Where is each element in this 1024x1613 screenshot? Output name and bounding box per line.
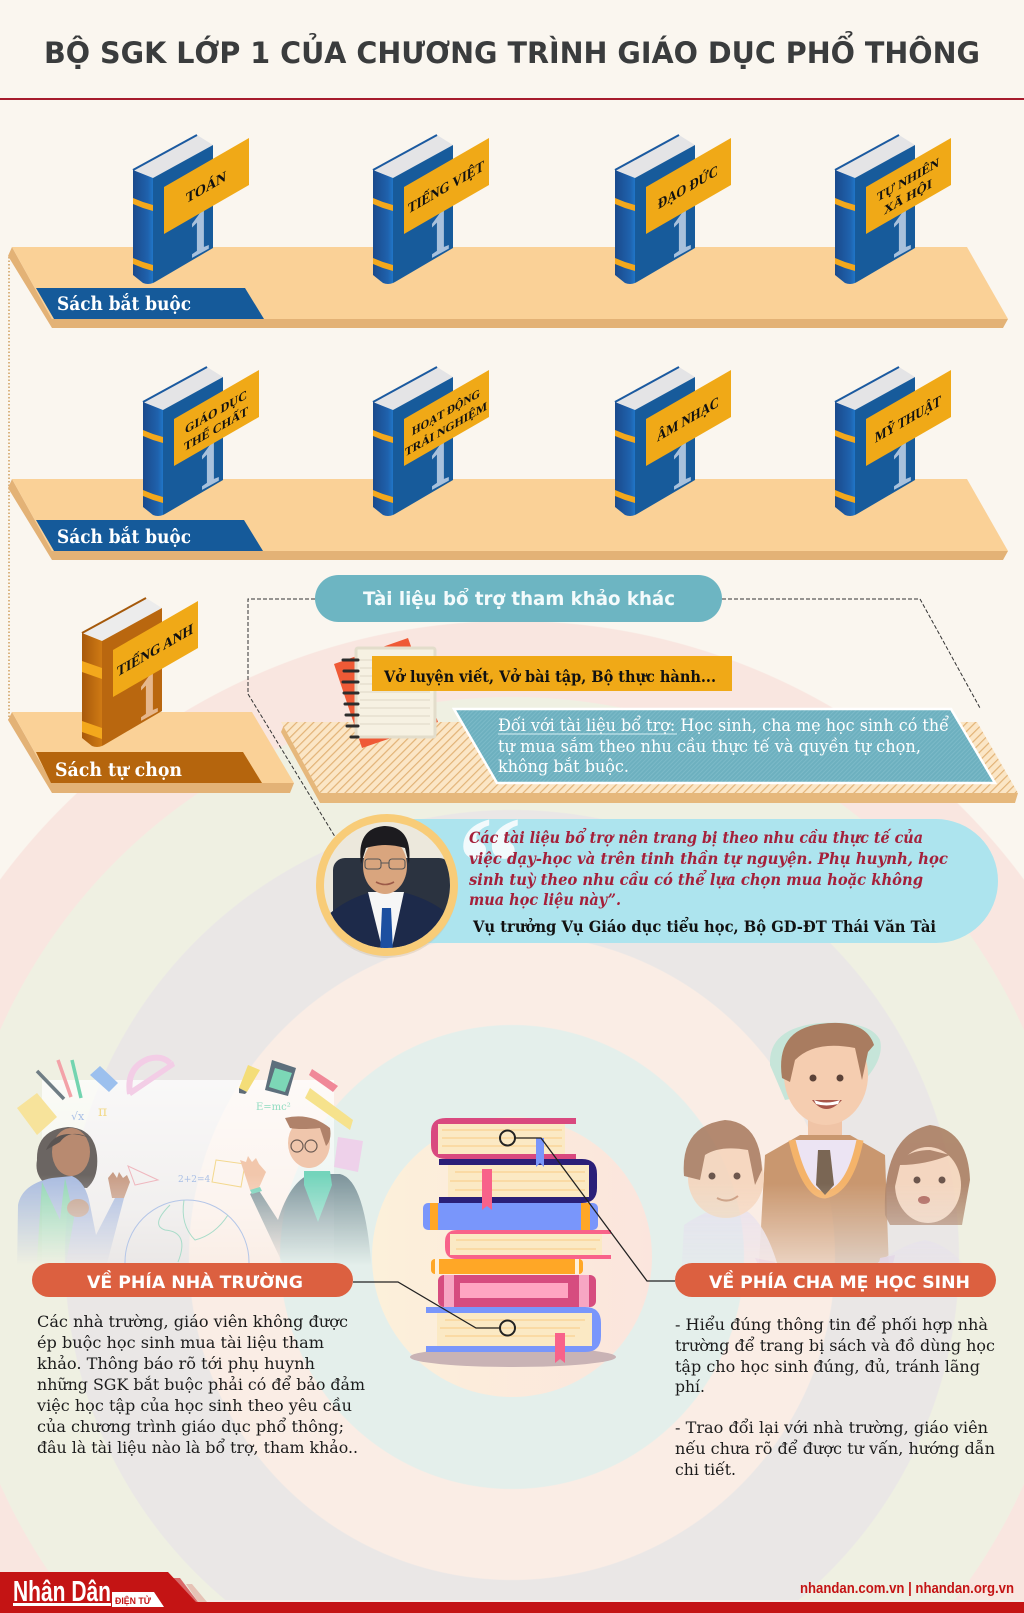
book: Đạo đức: 1 xyxy=(671,194,693,272)
quotation mark: “ xyxy=(457,791,522,935)
text: parents side xyxy=(675,1315,995,1479)
text: school side: những SGK bắt buộc phải có để bảo đảm xyxy=(37,1375,365,1394)
illustration: parents and children xyxy=(684,1022,970,1263)
bottom book xyxy=(426,1307,601,1363)
board doodles: √x xyxy=(71,1110,85,1123)
text: school side: ép buộc học sinh mua tài liệu tham xyxy=(37,1333,324,1352)
father xyxy=(761,1022,888,1263)
book: Tiếng Việt xyxy=(373,135,489,284)
text: parents side: chi tiết. xyxy=(675,1460,736,1479)
shelf 2 xyxy=(8,479,1008,560)
label: sách tự chọn: Sách tự chọn xyxy=(55,759,182,781)
dotted connector xyxy=(8,257,10,720)
shelf 3: optional book xyxy=(8,712,294,793)
logo: Nhân Dân: Nhân Dân xyxy=(13,1576,111,1608)
book: Đạo đức xyxy=(615,135,731,284)
logo: Nhân Dân: ĐIỆN TỬ xyxy=(115,1595,152,1606)
pill: school side: VỀ PHÍA NHÀ TRƯỜNG xyxy=(87,1269,303,1293)
board doodles: π xyxy=(98,1104,107,1120)
book: Âm nhạc: ÂM NHẠC xyxy=(657,392,719,446)
quote text: sinh tuỳ theo nhu cầu có thể lựa chọn mua hoặc không xyxy=(469,870,923,889)
note panel: supplementary materials: Đối với tài liệu bổ trợ: Học sinh, cha mẹ học sinh có thể xyxy=(498,716,950,736)
note panel: supplementary materials: không bắt buộc. xyxy=(498,757,629,777)
text: parents side: trường để trang bị sách và đồ dùng học xyxy=(675,1336,995,1355)
pill: parents side xyxy=(675,1263,996,1297)
connector: school to stack xyxy=(353,1282,515,1336)
pink open book xyxy=(445,1230,611,1259)
woman xyxy=(18,1127,130,1258)
text: parents side: - Trao đổi lại với nhà trường, giáo viên xyxy=(675,1418,988,1437)
text: school side: của chương trình giáo dục phổ thông; xyxy=(37,1417,344,1436)
book: Tiếng Việt: TIẾNG VIỆT xyxy=(408,156,484,218)
book: Hoạt động trải nghiệm: HOẠT ĐỘNG xyxy=(412,385,480,438)
pill heading: tài liệu bổ trợ xyxy=(315,575,722,622)
top book xyxy=(431,1118,576,1167)
book: Âm nhạc: 1 xyxy=(671,426,693,504)
quote attribution: Vụ trưởng Vụ Giáo dục tiểu học, Bộ GD-ĐT Thái Văn Tài xyxy=(472,917,936,936)
text: school side: Các nhà trường, giáo viên không được xyxy=(37,1312,348,1331)
illustration: school side xyxy=(17,1054,370,1263)
book: Tiếng Anh xyxy=(82,598,198,747)
board doodles: E=mc² xyxy=(256,1102,291,1113)
book: Tự nhiên xã hội: XÃ HỘI xyxy=(884,174,932,219)
book: Giáo dục thể chất xyxy=(143,367,259,516)
label: sách tự chọn xyxy=(36,752,262,783)
people xyxy=(18,1116,370,1258)
quote bubble xyxy=(400,791,998,943)
book: Giáo dục thể chất: THỂ CHẤT xyxy=(184,403,248,454)
quote text: việc dạy-học và trên tinh thần tự nguyện. Phụ huynh, học xyxy=(469,849,949,868)
school supplies xyxy=(17,1058,363,1172)
book: Hoạt động trải nghiệm: TRẢI NGHIỆM xyxy=(405,398,487,459)
illustration: stack of books xyxy=(410,1118,616,1367)
orange book xyxy=(431,1259,583,1274)
book: Âm nhạc xyxy=(615,367,731,516)
dark book xyxy=(439,1159,597,1210)
text: school side: khảo. Thông báo rõ tới phụ huynh xyxy=(37,1354,315,1373)
book: Toán: TOÁN xyxy=(186,166,226,207)
note panel: supplementary materials: tự mua sắm theo nhu cầu thực tế và quyền tự chọn, xyxy=(498,737,921,757)
shelf 4: hatched xyxy=(281,722,1018,803)
text: parents side: phí. xyxy=(675,1377,705,1396)
pill heading: tài liệu bổ trợ: Tài liệu bổ trợ tham khảo khác xyxy=(363,587,675,610)
title: BỘ SGK LỚP 1 CỦA CHƯƠNG TRÌNH GIÁO DỤC PHỔ THÔNG xyxy=(44,30,980,70)
note panel: supplementary materials xyxy=(454,709,995,783)
text: school side: việc học tập của học sinh theo yêu cầu xyxy=(36,1396,352,1415)
book: Tự nhiên xã hội: TỰ NHIÊN xyxy=(877,154,939,206)
whiteboard xyxy=(42,1080,334,1270)
header rule xyxy=(0,98,1024,100)
logo: Nhân Dân xyxy=(0,1572,207,1613)
book: Mỹ thuật: MỸ THUẬT xyxy=(875,390,941,447)
pill: school side xyxy=(32,1263,353,1297)
quote text: mua học liệu này”. xyxy=(469,890,621,909)
book: Mỹ thuật: 1 xyxy=(891,426,913,504)
label: sách bắt buộc row 2 xyxy=(36,520,263,551)
book: Tiếng Anh: 1 xyxy=(138,657,160,735)
inner circle behind book stack xyxy=(372,1117,652,1397)
connector: parents to stack xyxy=(500,1130,675,1281)
text: parents side: nếu chưa rõ để được tư vấn, hướng dẫn xyxy=(675,1439,995,1458)
book: Tiếng Anh: TIẾNG ANH xyxy=(117,619,193,681)
quote text xyxy=(469,828,949,909)
label: workbooks xyxy=(372,656,732,691)
icon: notebook xyxy=(334,638,438,748)
board doodles: 2+2=4 xyxy=(178,1175,211,1185)
dashed connectors xyxy=(248,599,980,840)
book: Hoạt động trải nghiệm xyxy=(373,367,489,516)
label: sách bắt buộc row 1 xyxy=(36,288,264,319)
label: sách bắt buộc row 2: Sách bắt buộc xyxy=(57,526,191,548)
text: parents side: - Hiểu đúng thông tin để phối hợp nhà xyxy=(675,1315,988,1334)
pink closed book xyxy=(438,1275,596,1307)
footer bar xyxy=(0,1600,1024,1613)
blue closed book xyxy=(423,1203,598,1230)
book: Tự nhiên xã hội xyxy=(835,135,951,284)
book: Toán xyxy=(133,135,249,284)
book: Mỹ thuật xyxy=(835,367,951,516)
text: school side xyxy=(36,1312,365,1457)
board doodles xyxy=(71,1102,291,1187)
label: sách bắt buộc row 1: Sách bắt buộc xyxy=(57,293,191,315)
pill: parents side: VỀ PHÍA CHA MẸ HỌC SINH xyxy=(709,1269,970,1293)
book: Đạo đức: ĐẠO ĐỨC xyxy=(658,161,718,213)
quote text: Các tài liệu bổ trợ nên trang bị theo nhu cầu thực tế của xyxy=(469,828,923,847)
shelf 1 xyxy=(8,247,1008,328)
label: workbooks: Vở luyện viết, Vở bài tập, Bộ thực hành... xyxy=(383,667,716,686)
book: Giáo dục thể chất: GIÁO DỤC xyxy=(185,387,247,437)
text: school side: đâu là tài liệu nào là bổ trợ, tham khảo.. xyxy=(37,1438,358,1457)
globe sketch xyxy=(124,1200,250,1263)
man xyxy=(240,1116,370,1258)
book: Toán: 1 xyxy=(189,194,211,272)
book: Hoạt động trải nghiệm: 1 xyxy=(429,426,451,504)
book: Tự nhiên xã hội: 1 xyxy=(891,194,913,272)
book: Giáo dục thể chất: 1 xyxy=(199,426,221,504)
girl xyxy=(878,1125,970,1263)
boy xyxy=(684,1120,777,1263)
text: parents side: tập cho học sinh đúng, đủ, tránh lãng xyxy=(675,1357,980,1376)
portrait xyxy=(316,814,458,960)
book: Tiếng Việt: 1 xyxy=(429,194,451,272)
